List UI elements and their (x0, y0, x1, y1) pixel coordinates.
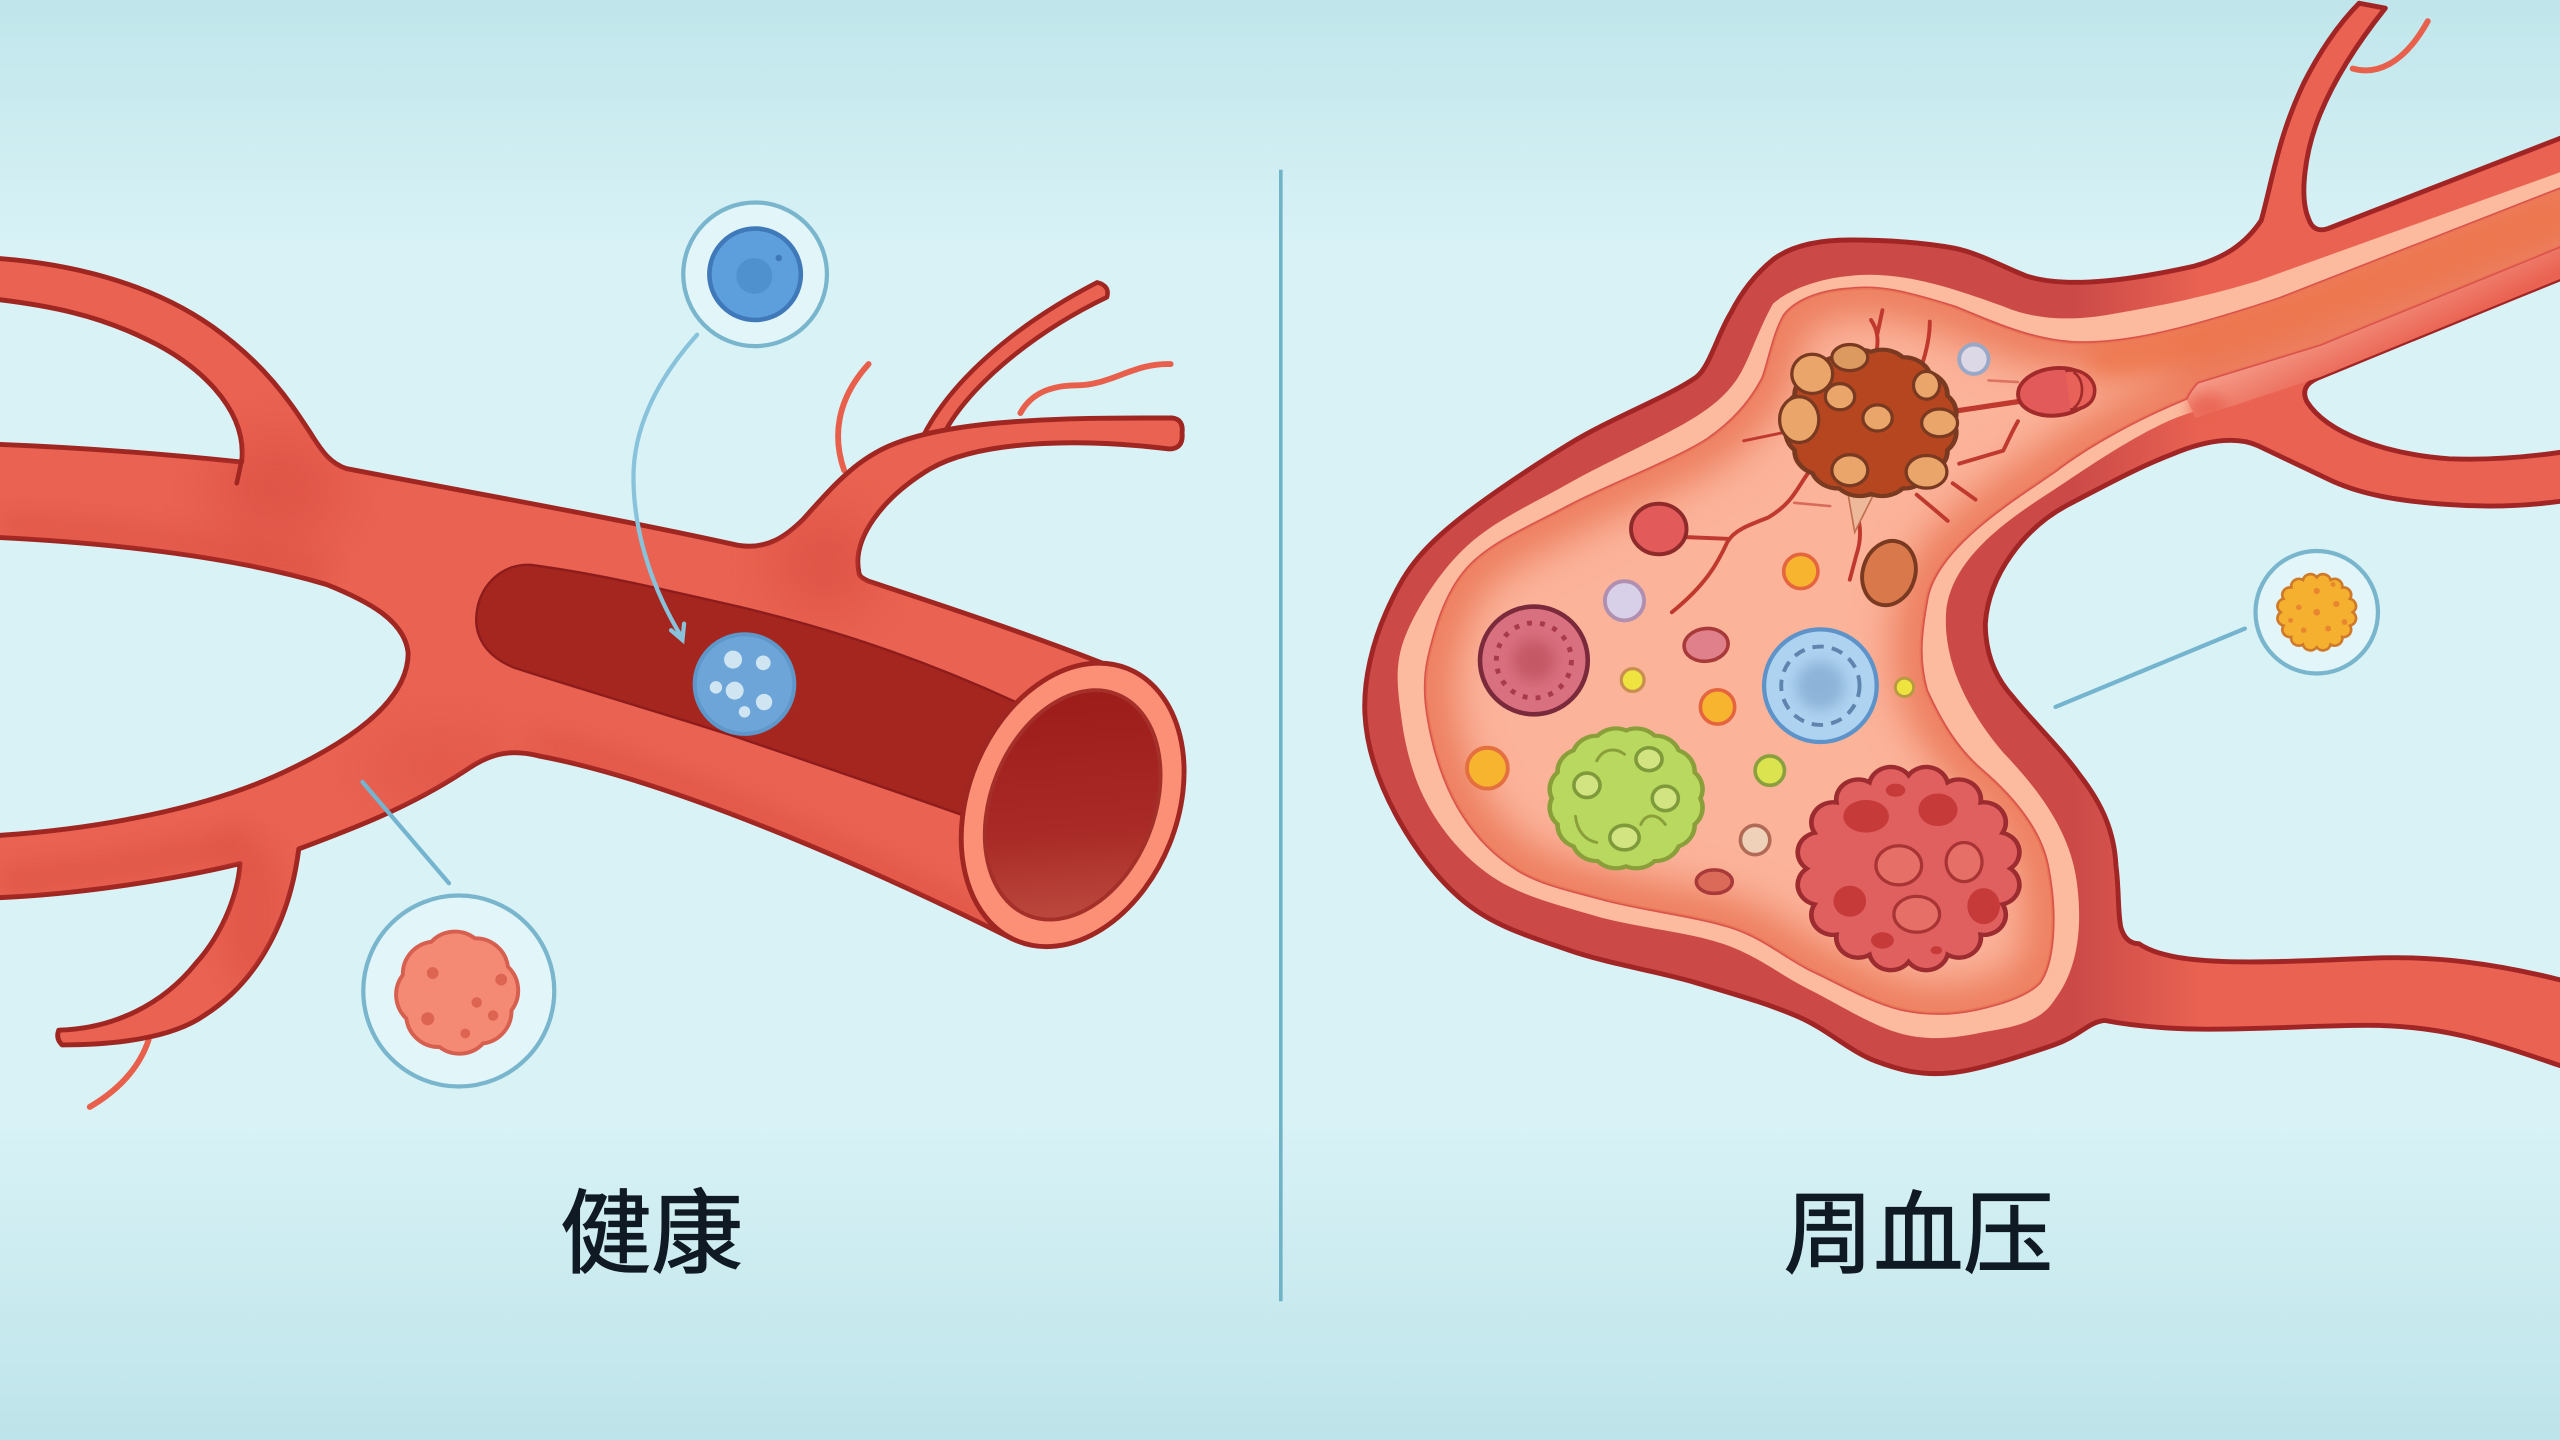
pink neck shading (2186, 242, 2560, 418)
cell: yellow tiny (1895, 678, 1914, 696)
neck band fade (2188, 393, 2227, 423)
panel: healthy artery (0, 202, 1225, 1107)
upper twig (919, 282, 1108, 444)
cell: amber left (1467, 748, 1508, 789)
light inner band (1398, 168, 2560, 1038)
cell: beige (1740, 825, 1770, 855)
cell: brown oval (1854, 534, 1924, 612)
callout: blue cell (683, 202, 827, 346)
cell: lilac top (1959, 344, 1989, 374)
thin twig (2353, 21, 2428, 70)
cell: red oval small (1696, 870, 1732, 893)
callout: yellow cell (2256, 551, 2378, 673)
lumen (1425, 184, 2560, 1013)
notch line (237, 460, 242, 483)
cell: rose (1480, 607, 1588, 714)
cell: pink oval (1682, 626, 1730, 663)
cell: green scalloped (1550, 728, 1703, 868)
cell: capsule (2016, 364, 2095, 419)
cell: blue (1764, 629, 1877, 742)
thin capillaries (90, 364, 1171, 1107)
arrow to blue cell (633, 335, 697, 640)
label: perivascular: 周血压 (1784, 1185, 2053, 1285)
cell: large red scalloped (1798, 767, 2019, 970)
vessel wall silhouette (1365, 3, 2560, 1074)
cell: amber small (1700, 690, 1735, 724)
artery body (0, 258, 1182, 1045)
tumour vessels (1672, 310, 2018, 612)
tumour mass (1780, 344, 1958, 532)
inner lumen (476, 565, 1037, 821)
divider (1280, 170, 1282, 1301)
callout: pink cell (363, 896, 554, 1087)
lumen inner shading (1425, 184, 2560, 1013)
cell: small yellow (1621, 669, 1644, 691)
soft shading at junctions (0, 431, 1012, 989)
callout line (2056, 629, 2245, 707)
leader line (362, 782, 449, 883)
vessel opening interior (952, 664, 1193, 946)
cell: lime small (1755, 756, 1784, 785)
cell: lilac (1605, 581, 1644, 620)
panel: perivascular diseased vessel (1365, 3, 2560, 1074)
cell: amber (1784, 554, 1818, 589)
vessel opening rim (921, 630, 1225, 980)
cell: red with stem (1631, 504, 1687, 554)
blue cell in lumen (695, 634, 794, 734)
label: healthy: 健康 (560, 1183, 743, 1285)
